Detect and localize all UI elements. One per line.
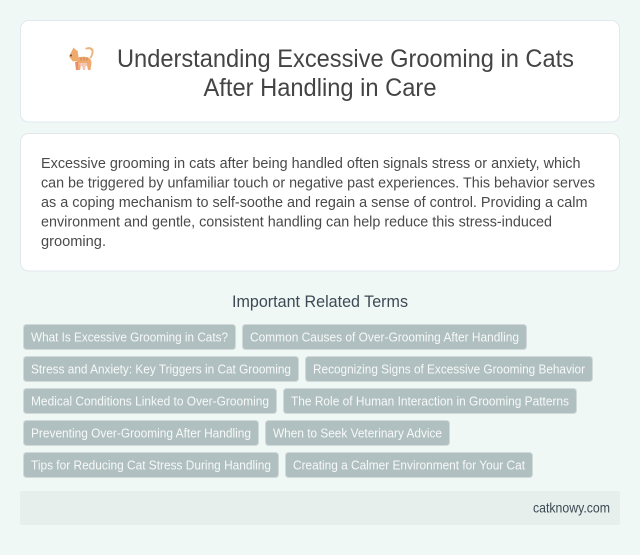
- chip: Stress and Anxiety: Key Triggers in Cat Grooming: [31, 362, 291, 376]
- chip: Medical Conditions Linked to Over-Grooming: [31, 394, 269, 408]
- chip: Recognizing Signs of Excessive Grooming Behavior: [313, 362, 586, 376]
- chip: Common Causes of Over-Grooming After Handling: [250, 330, 519, 344]
- chip: [266, 420, 450, 446]
- footer: [20, 491, 620, 525]
- chip: [306, 356, 592, 382]
- related terms chips: [24, 324, 592, 478]
- chip: What Is Excessive Grooming in Cats?: [31, 330, 228, 344]
- chip: [24, 452, 278, 478]
- chip: [24, 420, 258, 446]
- intro text: grooming.: [41, 233, 106, 250]
- chip: [24, 356, 298, 382]
- chip: [286, 452, 532, 478]
- chip: [24, 324, 236, 350]
- chip: [242, 324, 526, 350]
- chip: Preventing Over-Grooming After Handling: [31, 426, 251, 440]
- intro panel: [20, 134, 620, 271]
- chip: When to Seek Veterinary Advice: [273, 426, 442, 440]
- intro text: as a coping mechanism to self-soothe and regain a sense of control. Providing a calm: [41, 194, 588, 211]
- section heading: Important Related Terms: [232, 293, 408, 311]
- footer site name: catknowy.com: [533, 500, 610, 516]
- intro text: [41, 155, 595, 250]
- title: Understanding Excessive Grooming in Cats: [117, 45, 574, 73]
- chip: [284, 388, 576, 414]
- intro text: environment and gentle, consistent handling can help reduce this stress-induced: [41, 214, 552, 230]
- intro text: can be triggered by unfamiliar touch or negative past experiences. This behavior serves: [41, 174, 595, 192]
- chip: The Role of Human Interaction in Grooming Patterns: [291, 394, 569, 408]
- title: After Handling in Care: [204, 74, 436, 102]
- intro text: Excessive grooming in cats after being handled often signals stress or anxiety, which: [41, 155, 580, 172]
- chip: [24, 388, 276, 414]
- header panel: [20, 20, 620, 122]
- icon: cat: [69, 47, 94, 70]
- chip: Tips for Reducing Cat Stress During Handling: [31, 458, 271, 472]
- title: [117, 45, 574, 102]
- chip: Creating a Calmer Environment for Your Cat: [293, 458, 525, 472]
